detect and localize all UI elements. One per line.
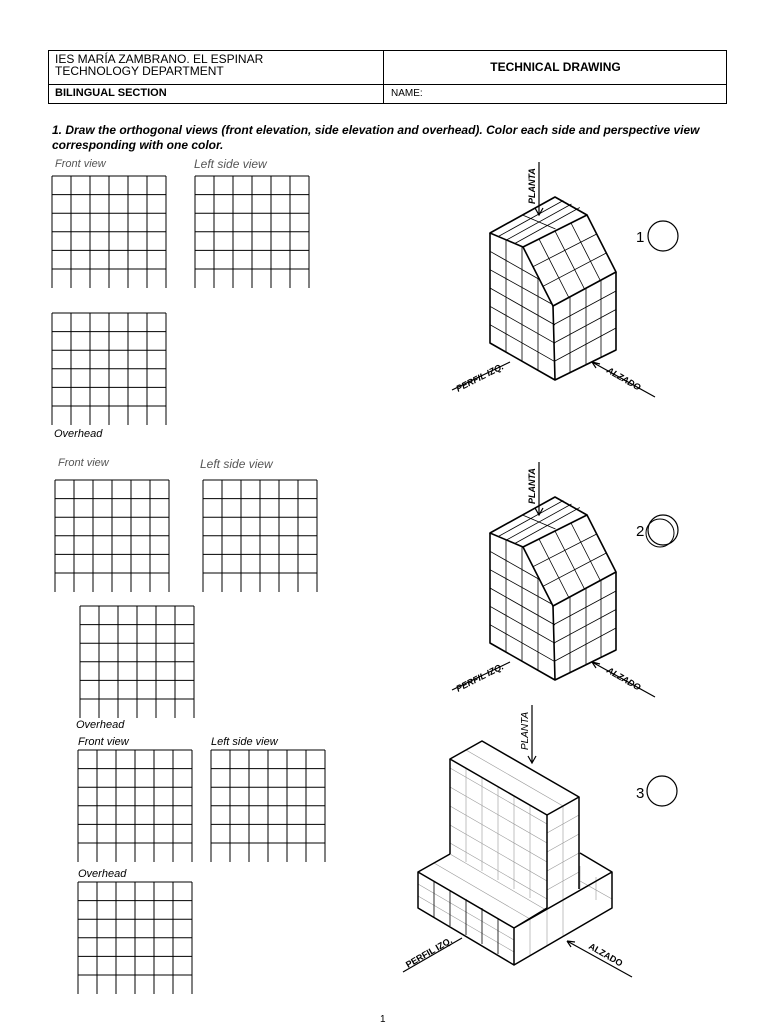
grids	[52, 176, 166, 288]
figure 2	[452, 462, 655, 697]
text: Left side view	[200, 457, 273, 471]
circle 3: 3	[636, 785, 644, 802]
subject: TECHNICAL DRAWING	[490, 60, 621, 74]
circle 1	[636, 221, 678, 251]
school name: TECHNOLOGY DEPARTMENT	[55, 64, 224, 78]
header table	[48, 50, 727, 104]
text: Left side view	[194, 157, 267, 171]
section: BILINGUAL SECTION	[55, 87, 167, 99]
view labels: Front view	[55, 158, 106, 170]
figure 3: ALZADO	[587, 941, 624, 968]
school name	[55, 52, 263, 78]
figure 1	[452, 162, 655, 397]
circle 2: 2	[636, 523, 644, 540]
text: Front view	[58, 457, 109, 469]
figure 3: PLANTA	[520, 712, 531, 750]
page number: 1	[380, 1014, 386, 1025]
circle 1: 1	[636, 229, 644, 246]
text: Overhead	[76, 719, 124, 731]
name field: NAME:	[391, 88, 423, 99]
instructions: 1. Draw the orthogonal views (front elevation, side elevation and overhead). Color each side and perspective view corresponding with one color.	[52, 123, 700, 152]
circle 3	[636, 776, 677, 806]
text: Left side view	[211, 736, 278, 748]
figure 3	[403, 705, 632, 977]
text: Overhead	[54, 428, 102, 440]
text: Front view	[78, 736, 129, 748]
text: Overhead	[78, 868, 126, 880]
circle 2	[636, 515, 678, 547]
school name: IES MARÍA ZAMBRANO. EL ESPINAR	[55, 52, 263, 66]
figure 3: PERFIL IZQ.	[404, 935, 454, 970]
